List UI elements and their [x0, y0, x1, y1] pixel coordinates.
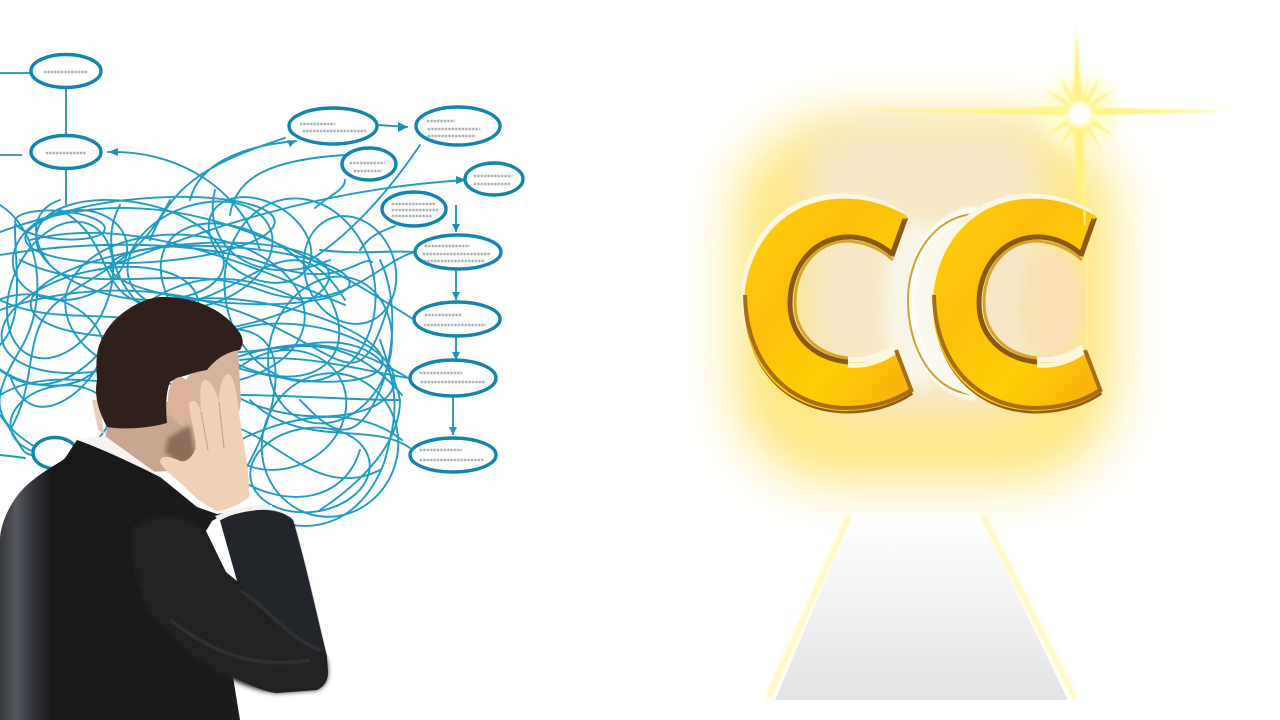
right letter C — [930, 194, 1102, 414]
beard shadow — [165, 425, 196, 466]
connectors between nodes — [0, 73, 456, 435]
CC logo — [741, 180, 1102, 414]
outer yellow halo — [735, 122, 1115, 482]
ramp with glowing edges — [768, 515, 1075, 700]
flow diagram nodes and connectors — [0, 54, 523, 472]
sleeve fold highlights — [170, 590, 320, 663]
gap under the arm — [206, 517, 237, 581]
sleeve upper forearm — [219, 510, 327, 657]
tangled scribble of process lines — [0, 138, 466, 532]
starburst light flare — [850, 25, 1232, 235]
suit jacket — [0, 440, 328, 720]
left letter C — [741, 194, 913, 414]
arrow heads — [108, 122, 466, 435]
inner peach wash — [800, 120, 1050, 420]
shirt cuff — [215, 505, 272, 521]
flare ray over the right C — [1083, 180, 1087, 350]
warm peach inside right letter — [1020, 250, 1084, 360]
middle linking crescent — [908, 211, 978, 396]
shirt collar — [75, 436, 200, 510]
illegible node captions rendered as blurred marks — [44, 72, 512, 460]
sleeve slightly lighter tone — [133, 516, 328, 693]
stray hand behind head — [92, 400, 104, 434]
star spikes — [1041, 72, 1119, 154]
central white-hot spot between the letters — [883, 220, 953, 390]
node ovals — [31, 54, 523, 472]
hair — [96, 297, 243, 428]
ear-side face — [105, 348, 241, 470]
finger creases — [201, 402, 224, 450]
golden glow behind the CC logo — [735, 120, 1115, 482]
hand covering face — [160, 374, 249, 511]
neck skin — [105, 415, 195, 472]
ear — [168, 377, 192, 419]
stressed businessman seen from behind — [0, 297, 328, 720]
